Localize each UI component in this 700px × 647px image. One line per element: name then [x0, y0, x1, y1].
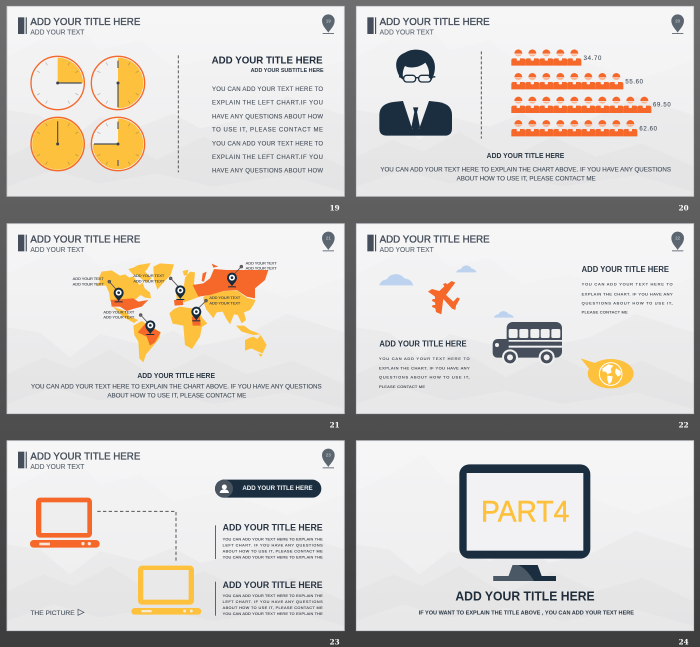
- slide subtitle: IF YOU WANT TO EXPLAIN THE TITLE ABOVE , YOU CAN ADD YOUR TEXT HERE: [419, 610, 634, 616]
- panel: slide 23 laptops: [7, 441, 344, 646]
- text block: upper right: ADD YOUR TITLE HERE: [582, 265, 670, 274]
- text block: caption: ADD YOUR TITLE HERE: [487, 153, 565, 160]
- clock: half: [91, 56, 145, 110]
- chart row: 69.50: [511, 97, 671, 113]
- text block: caption: ADD YOUR TITLE HERE: [137, 373, 215, 380]
- header bar icon: [18, 235, 27, 251]
- monitor text: PART4: [481, 495, 569, 528]
- text block: first: YOU CAN ADD YOUR TEXT HERE TO EXPLAIN THE: [223, 555, 323, 559]
- header bar icon: [18, 452, 27, 468]
- text block: lower left: QUESTIONS ABOUT HOW TO USE IT,: [379, 375, 470, 380]
- text block: caption: [380, 153, 671, 182]
- map: location labels: ADD YOUR TEXT: [246, 266, 277, 271]
- text block: body: [212, 87, 323, 174]
- text block: body: EXPLAIN THE LEFT CHART.IF YOU: [212, 101, 323, 107]
- page number: 19: [330, 203, 340, 212]
- map: location labels: ADD YOUR TEXT: [209, 295, 241, 300]
- header bar icon: [367, 235, 376, 251]
- icon: page pin: [671, 14, 684, 34]
- icon: page pin: 19: [326, 18, 331, 23]
- map: location labels: [73, 260, 277, 320]
- text block: first: [215, 523, 323, 559]
- icon: globe speech bubble: [581, 358, 634, 388]
- page number: 23: [330, 637, 340, 646]
- text block: first: ABOUT HOW TO USE IT, PLEASE CONTACT ME: [223, 549, 323, 553]
- icon: page pin: 22: [675, 236, 681, 241]
- text block: lower left: ADD YOUR TITLE HERE: [379, 340, 467, 349]
- slide subheading: ADD YOUR TEXT: [380, 30, 434, 37]
- map: location labels: ADD YOUR TEXT: [73, 276, 104, 281]
- page number: 20: [679, 203, 689, 212]
- panel: slide 19 clocks: [7, 6, 344, 212]
- text block: caption: YOU CAN ADD YOUR TEXT HERE TO EXPLAIN THE CHART ABOVE. IF YOU HAVE ANY QUESTIONS: [380, 167, 671, 173]
- text block: body: HAVE ANY QUESTIONS ABOUT HOW: [212, 114, 323, 120]
- icon: airplane: [428, 281, 460, 314]
- chart row: 62.60: 62.60: [639, 126, 658, 132]
- icon: businessman: [379, 50, 452, 136]
- header bar icon: [367, 17, 376, 34]
- text block: first: YOU CAN ADD YOUR TEXT HERE TO EXPLAIN THE: [223, 537, 323, 541]
- text block: second: YOU CAN ADD YOUR TEXT HERE TO EXPLAIN THE: [223, 612, 323, 616]
- text block: body: TO USE IT, PLEASE CONTACT ME: [212, 128, 323, 134]
- text block: first: ADD YOUR TITLE HERE: [223, 523, 323, 533]
- text block: caption: ABOUT HOW TO USE IT, PLEASE CONTACT ME: [107, 394, 246, 400]
- icon: clouds: [379, 265, 514, 318]
- chart row: 55.60: [511, 73, 644, 89]
- text block: first: LEFT CHART. IF YOU HAVE ANY QUESTIONS: [223, 543, 323, 547]
- clock: three quarters: [91, 117, 145, 171]
- text block: body: EXPLAIN THE LEFT CHART.IF YOU: [212, 155, 323, 161]
- slide title: ADD YOUR TITLE HERE: [455, 589, 595, 604]
- text block: second: ADD YOUR TITLE HERE: [223, 580, 323, 590]
- text block: body: YOU CAN ADD YOUR TEXT HERE TO: [212, 87, 323, 93]
- panel: slide 21 world map: [7, 224, 344, 429]
- slide heading: ADD YOUR TITLE HERE: [380, 234, 490, 245]
- icon: orange laptop: [30, 498, 100, 548]
- slide heading: ADD YOUR TITLE HERE: [30, 451, 141, 462]
- text block: right title: ADD YOUR SUBTITLE HERE: [251, 68, 324, 74]
- page number: 22: [679, 420, 689, 429]
- text block: upper right: PLEASE CONTACT ME: [582, 309, 628, 314]
- icon: monitor: [459, 464, 590, 581]
- icon: page pin: [671, 232, 684, 251]
- slide heading: ADD YOUR TITLE HERE: [30, 17, 141, 28]
- map: location labels: ADD YOUR TEXT: [73, 281, 104, 286]
- text block: upper right: [582, 265, 673, 314]
- text block: second: YOU CAN ADD YOUR TEXT HERE TO EXPLAIN THE: [223, 594, 323, 598]
- panel: slide 24 part 4: [356, 441, 694, 646]
- slide heading: ADD YOUR TITLE HERE: [380, 17, 490, 28]
- icon: page pin: 21: [326, 236, 331, 241]
- map: location labels: ADD YOUR TEXT: [133, 273, 165, 278]
- chart row: 34.70: [511, 49, 602, 66]
- text block: second: LEFT CHART. IF YOU HAVE ANY QUESTIONS: [223, 600, 323, 604]
- icon: page pin: 20: [675, 18, 681, 23]
- text block: upper right: YOU CAN ADD YOUR TEXT HERE TO: [582, 281, 673, 286]
- text block: upper right: EXPLAIN THE CHART. IF YOU HAVE ANY: [582, 291, 673, 296]
- map: location labels: ADD YOUR TEXT: [246, 260, 277, 265]
- icon: yellow laptop: [131, 566, 201, 615]
- text block: right title: ADD YOUR TITLE HERE: [212, 55, 323, 66]
- chart row: 62.60: [511, 120, 658, 136]
- text block: caption: ABOUT HOW TO USE IT, PLEASE CONTACT ME: [457, 176, 596, 182]
- icon: page pin: 23: [326, 453, 331, 458]
- title pill: ADD YOUR TITLE HERE: [242, 485, 313, 492]
- map: location labels: ADD YOUR TEXT: [103, 309, 135, 314]
- icon: bus: [493, 322, 562, 365]
- slide subheading: ADD YOUR TEXT: [30, 464, 85, 471]
- text block: lower left: PLEASE CONTACT ME: [379, 384, 425, 389]
- icon: page pin: [322, 232, 335, 251]
- chart row: 69.50: 69.50: [653, 103, 671, 109]
- header bar icon: [18, 17, 27, 34]
- title pill: [215, 480, 321, 498]
- slide subheading: ADD YOUR TEXT: [30, 30, 85, 37]
- chart row: 34.70: 34.70: [584, 56, 602, 62]
- text block: lower left: YOU CAN ADD YOUR TEXT HERE TO: [379, 356, 470, 361]
- text block: second: [215, 580, 323, 616]
- text block: body: HAVE ANY QUESTIONS ABOUT HOW: [212, 168, 323, 174]
- map: orange highlighted countries: [111, 264, 268, 346]
- map: location pins and leaders: [108, 265, 243, 323]
- chart row: 55.60: 55.60: [625, 80, 644, 86]
- text block: right title: [212, 55, 324, 74]
- connector: dashed arrow: [97, 511, 176, 562]
- page number: 24: [679, 637, 689, 646]
- map: yellow regions: [96, 263, 267, 362]
- panel: slide 22 travel: [356, 224, 694, 429]
- page number: 21: [330, 420, 340, 429]
- clock: full: [31, 117, 84, 171]
- slide heading: ADD YOUR TITLE HERE: [30, 234, 141, 245]
- slide subheading: ADD YOUR TEXT: [30, 247, 85, 254]
- text block: caption: YOU CAN ADD YOUR TEXT HERE TO EXPLAIN THE CHART ABOVE. IF YOU HAVE ANY QUESTIONS: [31, 385, 322, 391]
- text block: body: YOU CAN ADD YOUR TEXT HERE TO: [212, 141, 323, 147]
- chart: world map: [73, 260, 277, 362]
- text block: lower left: [379, 340, 470, 389]
- icon: page pin: [322, 14, 335, 34]
- text block: lower left: EXPLAIN THE CHART. IF YOU HAVE ANY: [379, 366, 470, 371]
- icon: page pin: [322, 449, 335, 468]
- clock: quarter: [31, 56, 84, 110]
- text block: upper right: QUESTIONS ABOUT HOW TO USE IT,: [582, 300, 673, 305]
- panel: slide 20 people chart: [356, 6, 694, 212]
- map: location labels: ADD YOUR TEXT: [103, 315, 135, 320]
- slide subheading: ADD YOUR TEXT: [380, 247, 434, 254]
- text block: second: ABOUT HOW TO USE IT, PLEASE CONTACT ME: [223, 606, 323, 610]
- text block: caption: [31, 373, 322, 400]
- map: location labels: ADD YOUR TEXT: [209, 300, 241, 305]
- map: location labels: ADD YOUR TEXT: [133, 278, 165, 283]
- caption with arrow: THE PICTURE: [30, 610, 75, 617]
